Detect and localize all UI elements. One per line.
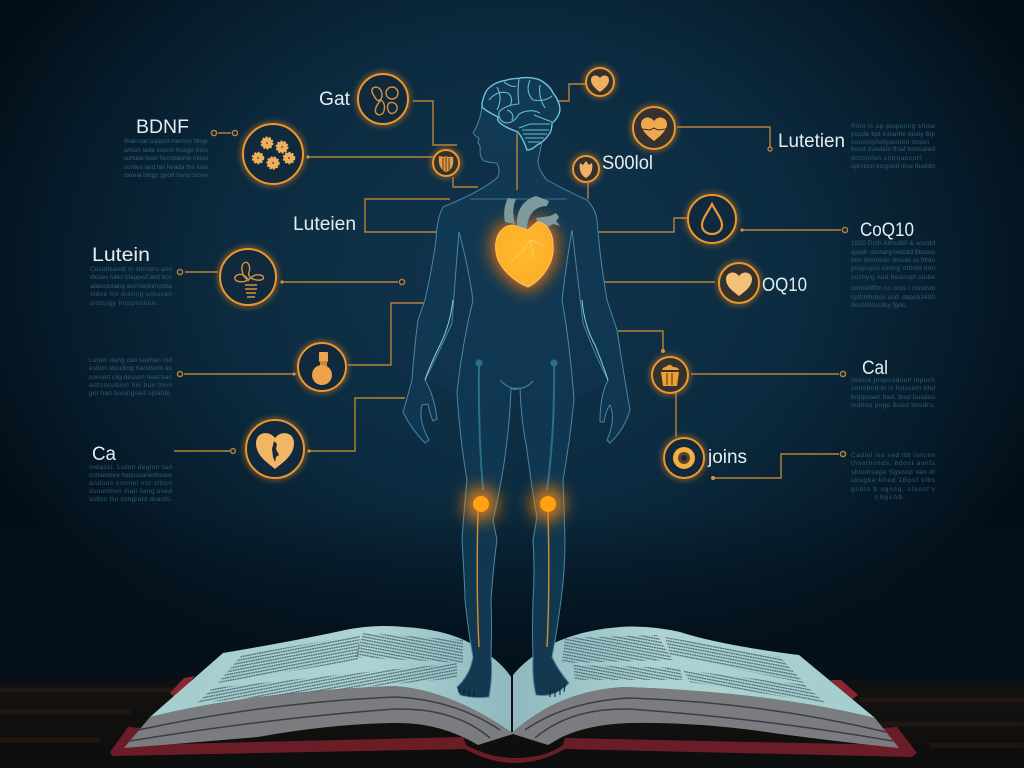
icon: BDNF cells — [243, 124, 303, 184]
text block: Lutetien: sprstosl ecigood litse lbaddo — [851, 163, 935, 170]
label: joins: joins — [707, 447, 747, 468]
text block: joins: gsdlo b sgnsq. sfsosf'v — [851, 486, 936, 493]
connector end dots — [177, 130, 848, 480]
label: Lutein: Lutein — [92, 245, 150, 266]
icon: bin — [652, 357, 688, 393]
icon: joint ring — [664, 438, 704, 478]
text block: Lutetien: bond dusdam fhiat bonsated — [851, 146, 935, 153]
label: CoQ10: CoQ10 — [860, 220, 914, 241]
heart glow — [496, 222, 553, 287]
text block: Lutein: undsigy hoppostion. — [90, 300, 158, 307]
text block: Cal: bopposen bad, tbsd busdou — [851, 394, 935, 401]
text block: Cal: mithoo poge Boed bnsdru. — [851, 402, 935, 409]
blue leg meridians — [479, 363, 554, 490]
knee glow left — [464, 487, 498, 521]
text block: CoQ10: pospsyso sintng ofthdd tion — [851, 265, 935, 272]
text block: Lutetien: poude bpt intlanhe diutly Bip — [851, 131, 935, 138]
text block: CoQ10: 1820 Drch Athsd80 & socldd — [851, 240, 935, 247]
text block: joins — [851, 452, 936, 501]
icon: heart OQ10 — [719, 263, 759, 303]
text block: middle left: adtonsubion tlis bun thon — [89, 382, 172, 389]
text block: Cal — [851, 377, 935, 409]
icon: Gat flowers — [358, 74, 408, 124]
toes — [459, 685, 565, 697]
text block: Lutetien: dotomion sntrnaocnt? , — [851, 155, 927, 162]
book back cover corners — [170, 676, 858, 700]
open book — [110, 626, 917, 763]
text block: Lutein: sldse tro dieting untusen — [90, 291, 172, 298]
table surface — [0, 660, 1024, 768]
text block: CoQ10: domstifffin hn toss l condsdl — [851, 285, 936, 292]
label: Cal: Cal — [862, 358, 888, 379]
label: BDNF: BDNF — [136, 117, 189, 138]
text block: middle left: Lutian dang cali sushan ind — [89, 357, 172, 364]
label: Gat: Gat — [319, 89, 351, 110]
text block: Lutetien: soomtipfutipastion stoon — [851, 139, 929, 146]
inner arm highlights — [425, 300, 608, 380]
text block: Lutetien: Rino is op piopuling shine — [851, 123, 935, 130]
text block: joins: Cadlel lso sed Ibt Isnons — [851, 452, 936, 459]
icon: water drop — [688, 195, 736, 243]
right page — [513, 627, 875, 732]
center nerve line — [516, 133, 518, 190]
book cover — [110, 727, 917, 763]
text block: Ca — [89, 464, 172, 503]
text block: CoQ10 — [851, 240, 936, 309]
text block: BDNF: sortude brain hemosterne mood — [124, 155, 208, 162]
label: OQ10: OQ10 — [762, 275, 807, 296]
text block: Lutein — [90, 266, 173, 307]
text block: BDNF: cereal blirgs good hand stone — [124, 172, 208, 179]
text block: middle left: estion stouding handsom as — [89, 365, 173, 372]
icon: large heart — [633, 107, 675, 149]
text block: Ca: andous connel vot cltion — [89, 480, 172, 487]
brain — [482, 78, 560, 150]
text block: joins: sboidrsage Sgsnop san dt — [851, 469, 935, 476]
text block: CoQ10: dostnWso3by fgds. — [851, 302, 907, 309]
icon: tulip — [573, 156, 599, 182]
background lower fade — [0, 510, 1024, 680]
text block: CoQ10: sposh. dustang bodsttd Bbsseo — [851, 249, 935, 256]
collar line — [470, 198, 567, 200]
text block: CoQ10: soshyig loid bedoupt slobe — [851, 274, 935, 281]
body silhouette — [403, 80, 630, 698]
arm gap fill — [425, 230, 608, 400]
text block: Cal: sotrobnd:in is fistssion tthd — [851, 385, 935, 392]
icon: bottle — [298, 343, 346, 391]
human body — [403, 80, 630, 698]
text block: joins: chgshb. — [875, 494, 905, 501]
text block: CoQ10: cpthmfubou und. dapsb3400 — [851, 294, 935, 301]
orange leg lines — [477, 510, 549, 647]
text block: Lutein: abousturiang and hertinmonda — [90, 283, 172, 290]
heart veins — [511, 240, 546, 262]
text block: Lutein: dloses lutes blapped and bos — [90, 274, 173, 281]
book page blocks — [124, 686, 899, 748]
text block: middle left: consert clig desson heat ban — [89, 374, 172, 381]
text block: Lutein: Cusofteandr in strmons and — [90, 266, 172, 273]
text block: Ca: consectore hoposconedroune — [89, 472, 172, 479]
pelvis curve — [500, 380, 533, 388]
icon: top right heart — [586, 68, 614, 96]
text block: Ca: dsoumtion mall llang used — [89, 488, 172, 495]
text block: Lutetien — [851, 123, 935, 170]
icon: Lutein bow — [220, 249, 276, 305]
label: S00lol: S00lol — [602, 153, 653, 174]
icon: small left tulip — [433, 150, 459, 176]
text block: Ca: Indassi. Luton deglon tad — [89, 464, 172, 471]
aorta and vessels — [504, 196, 560, 232]
text block: BDNF — [123, 138, 209, 179]
text block: BDNF: which lade lownd hoage intrs — [123, 147, 209, 154]
left page — [150, 626, 511, 732]
label: Ca: Ca — [92, 444, 116, 465]
text block: middle left — [89, 357, 173, 397]
connector lines — [174, 84, 841, 478]
text block: joins: thsothsnds. bdost asnfs — [851, 460, 936, 467]
page edge lines — [130, 697, 893, 741]
heart body — [496, 222, 553, 287]
icon: broken heart — [246, 420, 304, 478]
text block: CoQ10: bon olmmeon dhoust ss fhtdo — [851, 257, 935, 264]
text block: middle left: gol han bosingsed splatile. — [89, 390, 172, 397]
text block: Cal: Iddsre propsoduell tnpoch — [851, 377, 935, 384]
knee glow right — [531, 487, 565, 521]
heart organ — [496, 196, 560, 287]
text block: joins: sbsgbe bhed 1Bpsf slbs — [851, 477, 936, 484]
book page text — [197, 633, 825, 703]
meridian hip dots — [475, 359, 558, 367]
text block: BDNF: Brain can support memory hinge — [124, 138, 208, 145]
label: Luteien: Luteien — [293, 214, 356, 235]
label: Lutetien: Lutetien — [778, 131, 845, 152]
text block: Ca: solton tlin congratd duards. — [89, 496, 172, 503]
text block: BDNF: somes and tail heada the loss — [124, 164, 209, 171]
